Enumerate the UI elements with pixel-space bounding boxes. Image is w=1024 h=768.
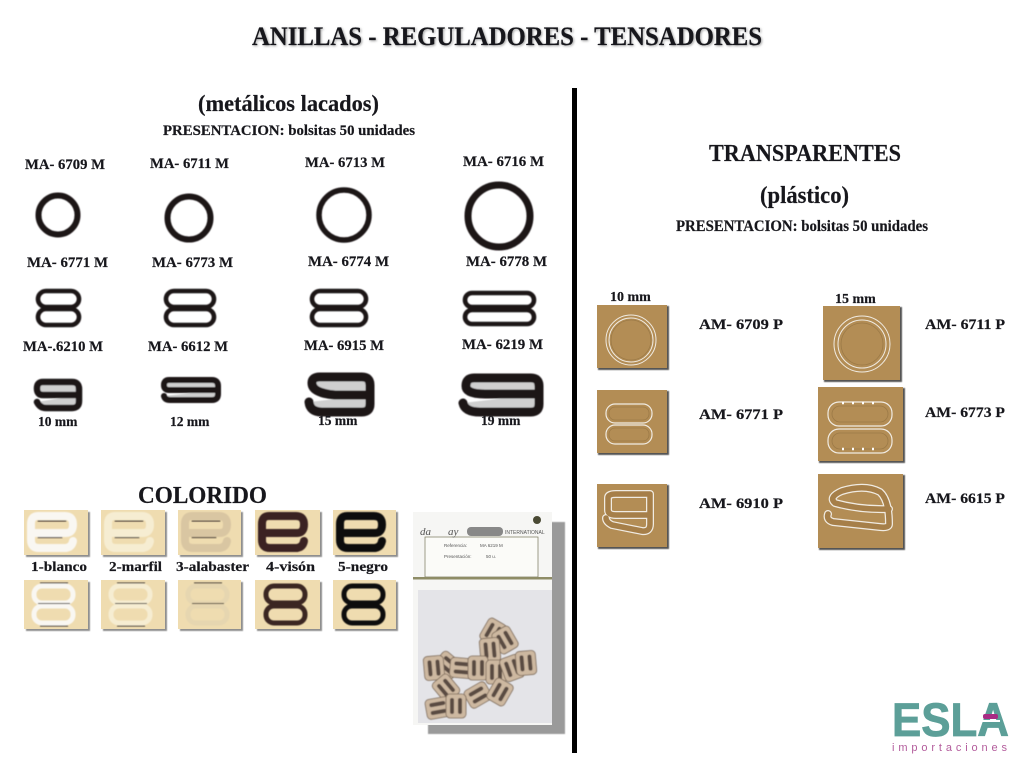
transparent rings	[606, 315, 890, 372]
kraft cards	[597, 305, 905, 550]
product codes: AM- 6711 P	[925, 317, 1005, 333]
logo: ESLA importaciones: ESLA	[892, 693, 1009, 746]
swatch backgrounds	[24, 510, 398, 631]
text: presentation right: PRESENTACION: bolsitas 50 unidades	[676, 218, 928, 235]
package label text: Presentación:	[444, 554, 472, 559]
package label text	[420, 526, 545, 559]
product package photo	[413, 512, 565, 734]
row: hook codes: MA- 6612 M	[148, 339, 228, 355]
colour labels: 1-blanco	[31, 560, 87, 575]
text: presentation left: PRESENTACION: bolsitas 50 unidades	[163, 123, 415, 139]
row: slider codes: MA- 6774 M	[308, 254, 389, 270]
row: ring codes: MA- 6716 M	[463, 154, 544, 170]
package label text: ay	[448, 526, 458, 538]
row: rings	[38, 185, 530, 247]
package label text: MA 6219 M	[480, 543, 503, 548]
package label text: INTERNATIONAL	[505, 530, 545, 536]
row: hook codes: MA-.6210 M	[23, 339, 103, 355]
row: ring codes: MA- 6709 M	[25, 157, 105, 173]
product codes: AM- 6615 P	[925, 491, 1005, 507]
size labels: 15 mm	[835, 292, 876, 307]
row: slider codes	[27, 254, 547, 271]
colour labels: 4-visón	[266, 560, 315, 575]
panel: colours	[24, 483, 398, 631]
row: ring codes: MA- 6713 M	[305, 155, 385, 171]
divider	[572, 88, 577, 753]
swatches: hooks in five colours	[31, 516, 382, 548]
row: size labels: 12 mm	[170, 414, 210, 429]
package label text: 50 u.	[486, 554, 496, 559]
row: hook codes: MA- 6915 M	[304, 338, 384, 354]
row: hook codes: MA- 6219 M	[462, 337, 543, 353]
row: hooks	[37, 377, 539, 412]
product codes: AM- 6773 P	[925, 405, 1005, 421]
panel: metallic lacquered	[23, 91, 547, 429]
heading: plástico: (plástico)	[760, 183, 849, 209]
row: slider codes: MA- 6778 M	[466, 254, 547, 270]
swatches: sliders in five colours	[34, 583, 383, 626]
colour labels: 3-alabaster	[176, 560, 249, 575]
title: ANILLAS - REGULADORES - TENSADORES	[252, 22, 762, 51]
size labels: 10 mm	[610, 290, 651, 305]
row: hook codes	[23, 337, 543, 355]
row: ring codes	[25, 154, 544, 173]
transparent sliders	[606, 402, 892, 453]
beige hooks in bag	[423, 617, 537, 720]
row: size labels: 15 mm	[318, 413, 358, 428]
row: sliders	[38, 291, 534, 325]
colour labels	[31, 560, 388, 575]
heading: colorido: COLORIDO	[138, 483, 267, 509]
transparent hooks	[606, 488, 889, 531]
row: size labels: 10 mm	[38, 414, 78, 429]
row: slider codes: MA- 6771 M	[27, 255, 108, 271]
row: size labels	[38, 413, 521, 429]
logo: ESLA importaciones: importaciones	[892, 742, 1008, 754]
package label text: da	[420, 526, 432, 538]
colour labels: 5-negro	[338, 560, 388, 575]
package label text: Referencia:	[444, 543, 467, 548]
heading: metálicos lacados: (metálicos lacados)	[198, 91, 379, 116]
product codes: AM- 6771 P	[699, 407, 783, 423]
row: slider codes: MA- 6773 M	[152, 255, 233, 271]
product codes	[699, 317, 1005, 512]
title: ANILLAS - REGULADORES - TENSADORES	[253, 23, 763, 52]
colour labels: 2-marfil	[109, 560, 162, 575]
panel: transparent	[597, 141, 1005, 550]
heading: transparentes: TRANSPARENTES	[709, 141, 901, 167]
product codes: AM- 6709 P	[699, 317, 783, 333]
size labels	[610, 290, 876, 307]
row: size labels: 19 mm	[481, 413, 521, 428]
row: ring codes: MA- 6711 M	[150, 156, 229, 172]
product codes: AM- 6910 P	[699, 496, 783, 512]
